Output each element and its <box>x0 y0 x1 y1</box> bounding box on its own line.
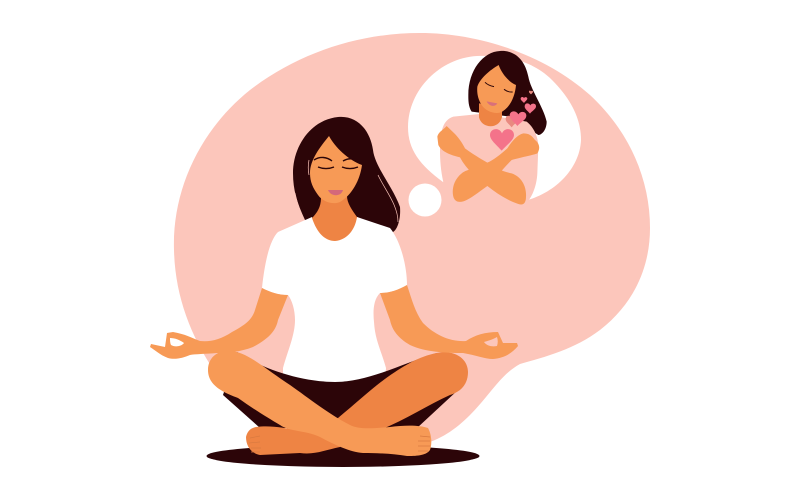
main figure hair <box>293 117 400 232</box>
main figure lips <box>328 190 343 195</box>
floating hearts <box>506 91 536 127</box>
back leg and foot <box>246 352 468 455</box>
main figure neck <box>312 196 357 241</box>
shorts <box>223 352 458 428</box>
small figure lips <box>487 101 497 106</box>
small figure eyes <box>485 82 513 92</box>
white thought bubble <box>408 56 581 200</box>
toe lines <box>249 436 430 452</box>
main figure face <box>310 136 362 203</box>
small figure hair <box>468 51 547 135</box>
ground shadow <box>206 445 480 467</box>
small figure arm, left to right <box>437 126 526 205</box>
small figure arm, right to left <box>453 133 539 202</box>
small figure face <box>477 65 516 113</box>
small figure: woman hugging herself <box>437 51 547 205</box>
main figure eyebrows and eyes <box>314 157 358 168</box>
front leg and foot <box>208 351 431 456</box>
right arm and mudra hand <box>380 285 518 359</box>
large floating heart <box>510 111 526 126</box>
small figure shirt <box>440 114 538 201</box>
small floating heart <box>521 97 527 103</box>
small thought circle <box>408 184 442 216</box>
tiny floating heart <box>529 91 533 94</box>
small figure neck <box>479 103 502 126</box>
hair highlights <box>295 160 398 222</box>
heart on chest <box>490 129 514 151</box>
left arm and mudra hand <box>150 288 288 359</box>
pink thought blob background <box>174 33 650 445</box>
main figure shirt <box>262 217 407 385</box>
medium floating heart <box>525 103 536 114</box>
shadow heart <box>506 116 517 127</box>
